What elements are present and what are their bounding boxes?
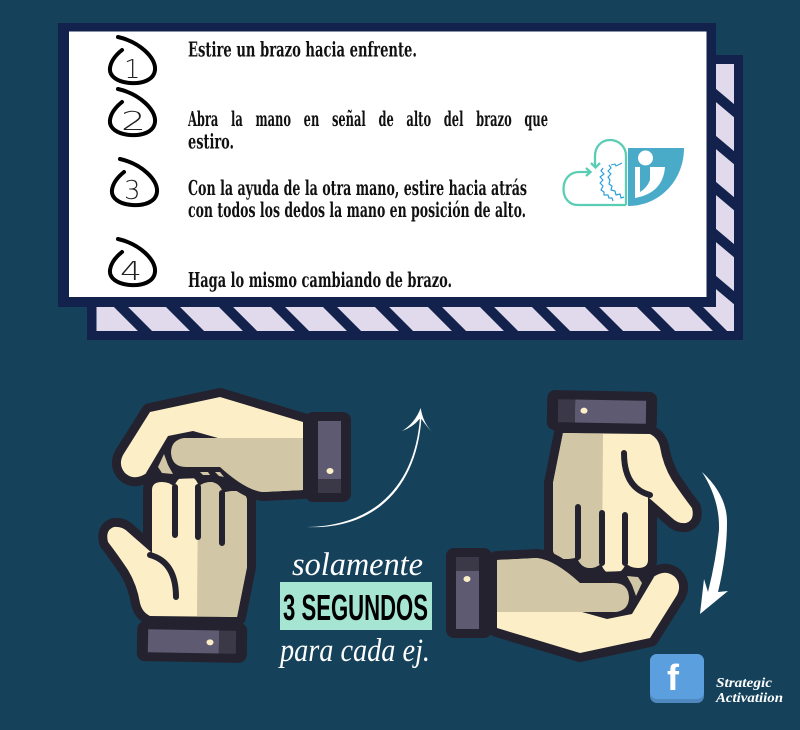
logo: heart and i [564, 140, 684, 206]
caption: para cada ej.: para cada ej. [278, 633, 430, 669]
highlight: 3 segundos: 3 SEGUNDOS [283, 587, 428, 628]
bottom cuff [137, 621, 247, 663]
step 2 text: Abra la mano en señal de alto del brazo que [187, 107, 548, 131]
number badge 1 [110, 37, 155, 85]
top hand with thumb [497, 558, 679, 653]
step 3 text [188, 176, 527, 222]
panel: white instructions card [58, 23, 716, 307]
number badge 2: 2 [121, 107, 146, 137]
top hand with thumb [121, 397, 303, 492]
open hand with fingers [553, 433, 693, 574]
open hand with fingers [107, 476, 247, 617]
number badge 4: 4 [120, 257, 142, 287]
number badge 3 [112, 159, 157, 206]
step 4 text: Haga lo mismo cambiando de brazo. [188, 268, 452, 292]
hands pair: left [107, 397, 351, 663]
step 1 text: Estire un brazo hacia enfrente. [188, 38, 417, 62]
cuff one [446, 548, 492, 638]
brand: Strategic Activatiion: Activatiion [715, 691, 783, 706]
number badge 4 [110, 239, 155, 287]
step 3 text: con todos los dedos la mano en posición de alto. [188, 198, 526, 222]
top cuff [305, 412, 351, 502]
arrow: curved up [307, 408, 433, 527]
icon: facebook [650, 654, 704, 703]
caption: solamente: solamente [292, 547, 423, 583]
icon: facebook: f [667, 657, 680, 698]
step 3 text: Con la ayuda de la otra mano, estire hacia atrás [188, 176, 527, 200]
number badge 2 [110, 89, 155, 137]
panel: striped back card [87, 55, 745, 340]
hands pair: right [446, 390, 693, 653]
number badge 1: 1 [124, 55, 141, 85]
step 2 text [187, 107, 548, 154]
step 2 text: estiro. [188, 130, 234, 154]
cuff two [547, 390, 657, 432]
number badge 3: 3 [124, 176, 141, 206]
brand: Strategic Activatiion: Strategic [716, 676, 773, 691]
arrow: curved down [700, 472, 728, 614]
brand: Strategic Activatiion [715, 676, 783, 706]
highlight: 3 segundos [280, 582, 432, 630]
